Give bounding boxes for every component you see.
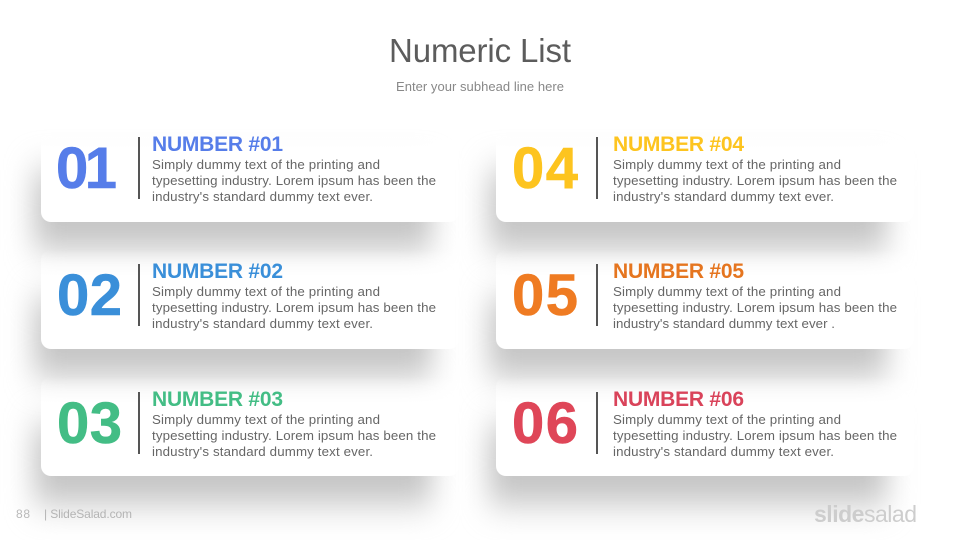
description 02: typesetting industry. Lorem ipsum has been the (152, 300, 436, 315)
footer site name: | SlideSalad.com (44, 507, 132, 521)
divider (138, 392, 140, 454)
description 03: typesetting industry. Lorem ipsum has been the (152, 428, 436, 443)
description 05: Simply dummy text of the printing and (613, 284, 841, 299)
heading 06: NUMBER #06 (613, 388, 744, 411)
number 06: 06 (512, 391, 578, 456)
heading 03: NUMBER #03 (152, 388, 283, 411)
heading 01: NUMBER #01 (152, 133, 283, 156)
card 05 (489, 250, 914, 377)
heading 02: NUMBER #02 (152, 260, 283, 283)
title: Numeric List (389, 32, 571, 69)
description 03: industry's standard dummy text ever. (152, 444, 373, 459)
description 06: typesetting industry. Lorem ipsum has been the (613, 428, 897, 443)
divider (596, 392, 598, 454)
card 04 (489, 123, 914, 250)
description 06: Simply dummy text of the printing and (613, 412, 841, 427)
description 01 (152, 157, 436, 204)
page number: 88 (16, 507, 30, 521)
divider (138, 137, 140, 199)
description 04 (613, 157, 897, 204)
description 05: industry's standard dummy text ever . (613, 316, 835, 331)
heading 05: NUMBER #05 (613, 260, 744, 283)
divider (596, 137, 598, 199)
card 06 (489, 377, 914, 504)
description 01: Simply dummy text of the printing and (152, 157, 380, 172)
description 06: industry's standard dummy text ever. (613, 444, 834, 459)
number 03: 03 (57, 391, 122, 456)
card 03 (34, 377, 459, 504)
number 02: 02 (57, 263, 122, 328)
subtitle: Enter your subhead line here (396, 79, 564, 94)
description 02: Simply dummy text of the printing and (152, 284, 380, 299)
number 05: 05 (512, 263, 578, 328)
number 01: 01 (56, 136, 117, 201)
description 01: industry's standard dummy text ever. (152, 189, 373, 204)
description 05 (613, 284, 897, 331)
card 01 (34, 123, 459, 250)
divider (596, 264, 598, 326)
number 04: 04 (512, 136, 578, 201)
heading 04: NUMBER #04 (613, 133, 744, 156)
description 03 (152, 412, 436, 459)
description 04: Simply dummy text of the printing and (613, 157, 841, 172)
divider (138, 264, 140, 326)
description 02: industry's standard dummy text ever. (152, 316, 373, 331)
card 02 (34, 250, 459, 377)
description 01: typesetting industry. Lorem ipsum has been the (152, 173, 436, 188)
description 02 (152, 284, 436, 331)
description 04: typesetting industry. Lorem ipsum has been the (613, 173, 897, 188)
logo: slidesalad: slidesalad (814, 501, 917, 527)
description 05: typesetting industry. Lorem ipsum has been the (613, 300, 897, 315)
description 03: Simply dummy text of the printing and (152, 412, 380, 427)
description 04: industry's standard dummy text ever. (613, 189, 834, 204)
description 06 (613, 412, 897, 459)
